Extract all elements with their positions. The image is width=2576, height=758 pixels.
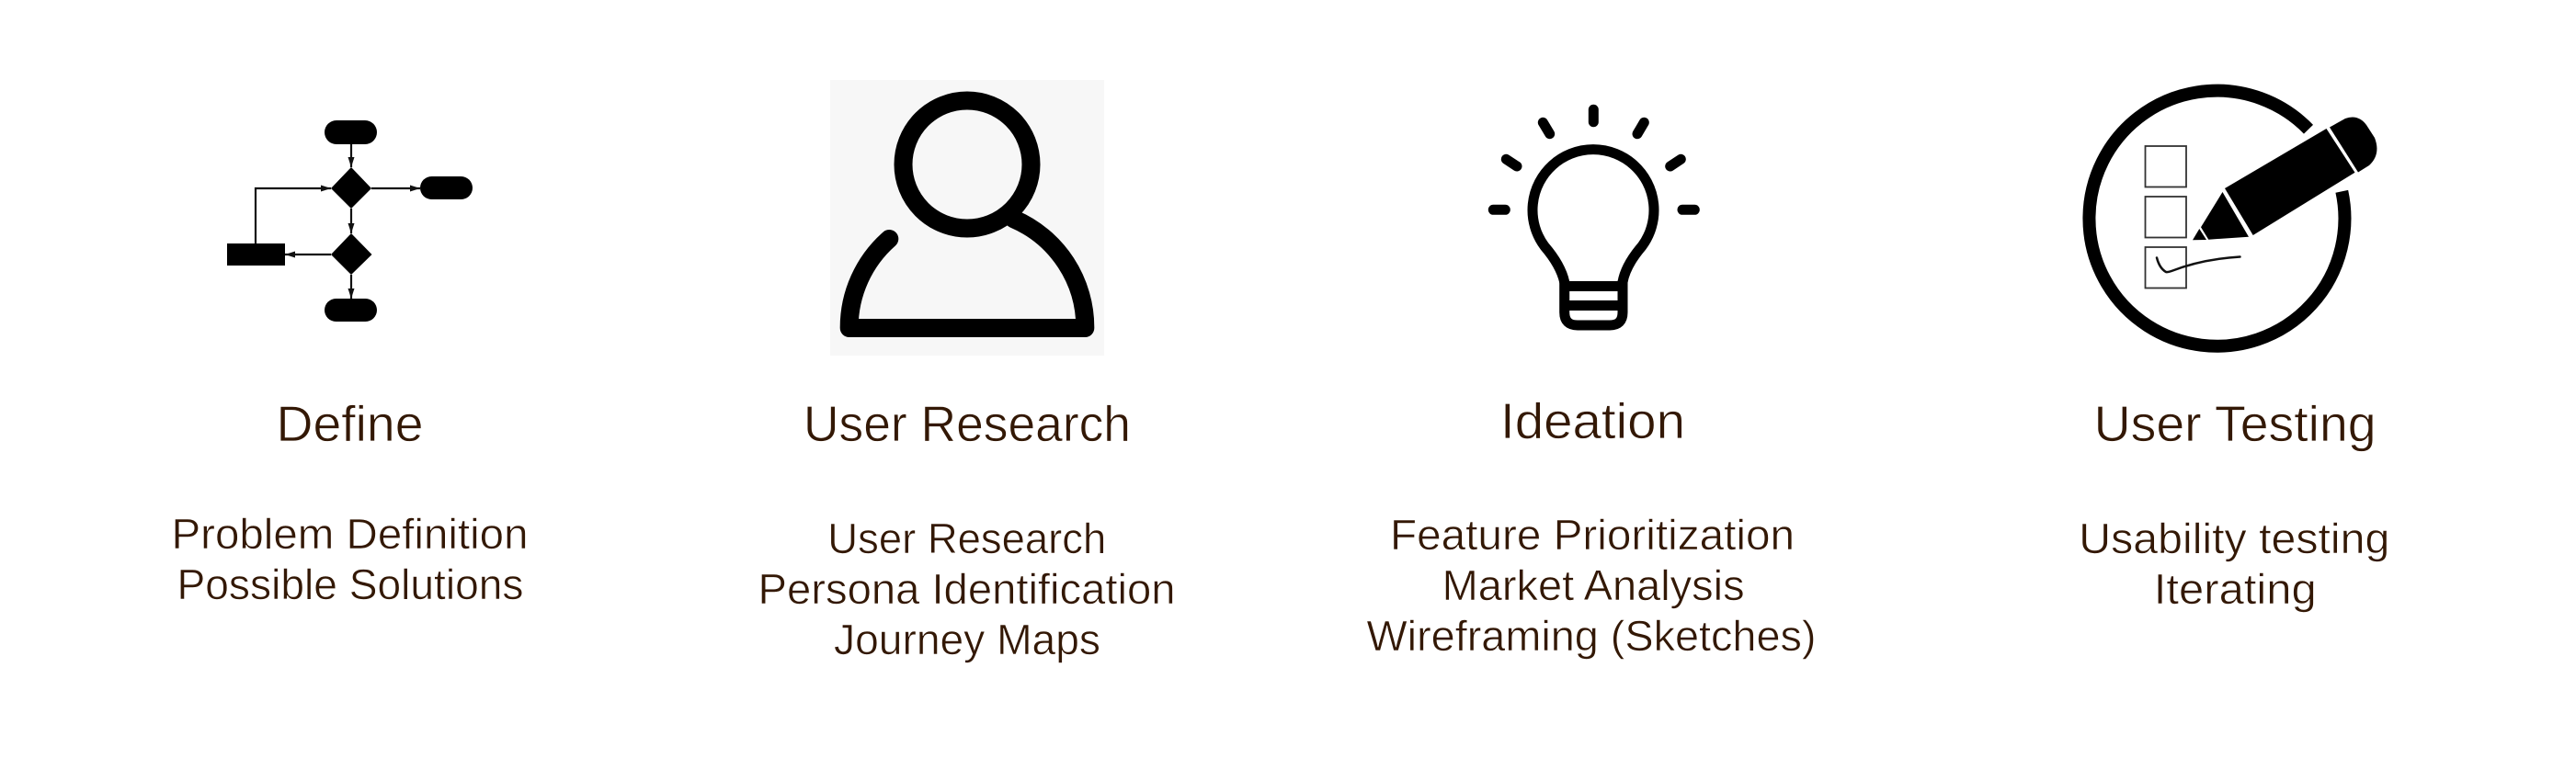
text block: define items: [171, 510, 528, 608]
text block: ideation items: Feature Prioritization: [1390, 511, 1795, 559]
icon: user: [830, 80, 1104, 356]
text block: define items: Possible Solutions: [177, 560, 524, 608]
text block: user research items: Journey Maps: [834, 616, 1100, 663]
icon: flowchart: [227, 120, 473, 322]
icon: light bulb: [1493, 109, 1694, 325]
text block: define items: Problem Definition: [171, 510, 528, 558]
text block: user testing items: Usability testing: [2079, 515, 2389, 562]
text block: ideation items: Market Analysis: [1442, 561, 1745, 609]
heading: User Testing: User Testing: [2094, 395, 2377, 452]
icon: checklist with pencil: [2089, 91, 2377, 346]
panel: user testing: [2079, 91, 2389, 613]
heading: Define: Define: [276, 395, 423, 452]
panel: ideation: [1366, 109, 1817, 660]
heading: User Research: User Research: [804, 395, 1131, 452]
panel: user research: [758, 80, 1175, 663]
text block: ideation items: Wireframing (Sketches): [1366, 612, 1817, 660]
panel: define: [171, 120, 528, 608]
text block: user testing items: [2079, 515, 2389, 613]
text block: user research items: User Research: [827, 515, 1106, 562]
text block: user research items: Persona Identification: [758, 565, 1175, 613]
text block: user testing items: Iterating: [2154, 565, 2317, 613]
text block: ideation items: [1366, 511, 1817, 660]
heading: Ideation: Ideation: [1500, 392, 1685, 449]
text block: user research items: [758, 515, 1175, 663]
